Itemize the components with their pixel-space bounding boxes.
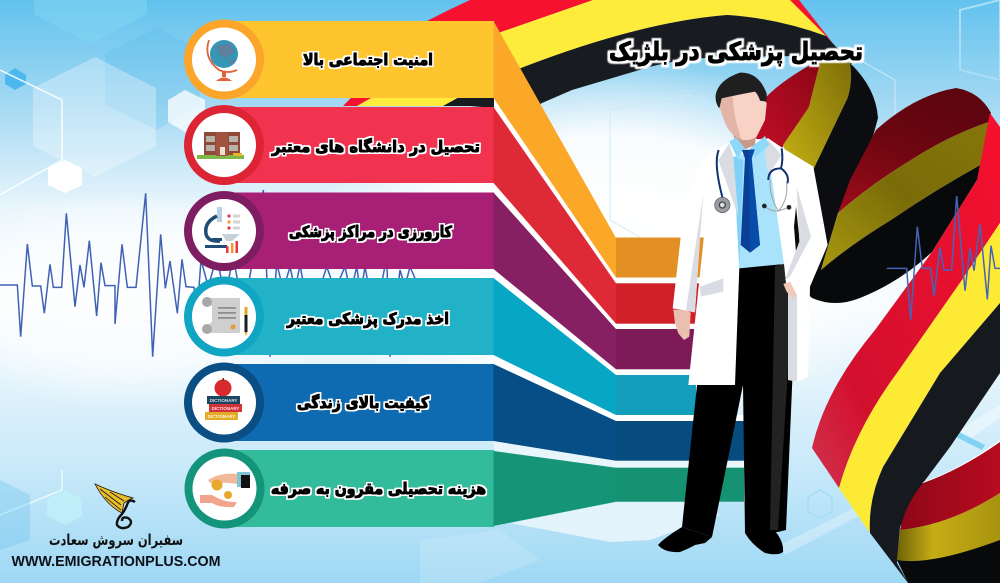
panel: item 5 quality of life (184, 362, 744, 461)
belgian flag ribbon (343, 0, 1000, 583)
logo: sefiran soroush saadat (12, 484, 220, 570)
panel: item 4 degree (184, 276, 696, 415)
stethoscope (715, 148, 791, 213)
label: item 2: تحصیل در دانشگاه های معتبر (271, 137, 480, 156)
white lab coat (688, 138, 828, 385)
left sleeve (673, 157, 705, 312)
label: item 6: هزینه تحصیلی مقرون به صرفه (271, 480, 486, 498)
icon: hands and coins (200, 472, 250, 507)
icon: globe (207, 40, 238, 81)
icon: microscope and chart (205, 207, 240, 253)
icon: university building (197, 132, 244, 159)
panel: item 1 security (184, 20, 704, 278)
icon: books and apple (205, 378, 242, 420)
icon: books and apple: DICTIONARY (208, 414, 235, 419)
face and hair (719, 90, 767, 140)
label: item 5: کیفیت بالای زندگی (297, 393, 430, 412)
icon: books and apple: DICTIONARY (212, 406, 239, 411)
logo wordmark: سفیران سروش سعادت (49, 531, 183, 549)
website address: WWW.EMIGRATIONPLUS.COM (12, 553, 220, 570)
label: item 1: امنیت اجتماعی بالا (303, 51, 433, 69)
white bands behind folds (494, 98, 745, 468)
icon: diploma scroll (202, 297, 248, 336)
title: تحصیل پزشکی در بلژیک (609, 37, 863, 67)
heartbeat line right (887, 196, 1000, 320)
doctor figure (658, 73, 828, 554)
heartbeat line left (0, 190, 420, 357)
icon: books and apple: DICTIONARY (210, 398, 237, 403)
necktie (741, 149, 760, 253)
panel: item 2 universities (184, 105, 700, 324)
icon: winged bird (95, 484, 135, 528)
shirt and collar (733, 147, 784, 268)
label: item 4: اخذ مدرک پزشکی معتبر (286, 310, 449, 329)
trousers and shoes (658, 264, 796, 554)
panel: item 3 internship (184, 191, 696, 369)
panel: item 6 affordable cost (184, 448, 744, 528)
label: item 3: کارورزی در مراکز پزشکی (289, 223, 453, 242)
